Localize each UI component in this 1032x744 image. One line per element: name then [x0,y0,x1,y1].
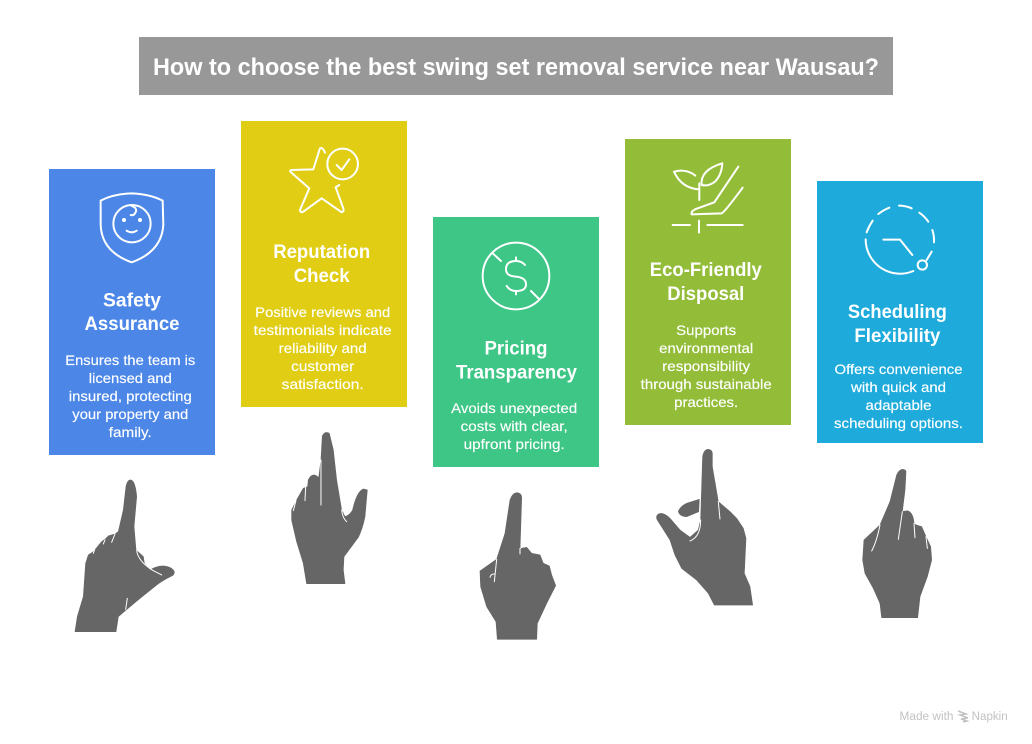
text: safety description: licensed and [89,370,172,386]
hand pointing at safety panel [75,480,174,632]
text: scheduling description [834,361,963,431]
text: eco-friendly description: through sustainable [641,376,772,392]
panel: scheduling flexibility [817,181,983,443]
hand pointing at pricing panel [480,493,556,639]
heading: eco-friendly disposal: Disposal [667,284,744,305]
text: reputation description: Positive reviews and [255,304,390,320]
title: How to choose the best swing set removal service near Wausau? [153,54,879,81]
text: eco-friendly description: Supports [676,322,736,338]
text: scheduling description: scheduling options. [834,415,963,431]
text: reputation description: testimonials indicate [254,322,392,338]
panel: reputation check [241,121,407,407]
icon: shield with baby face [101,193,163,262]
hand pointing at eco-friendly panel [657,449,753,605]
panel: eco-friendly disposal [625,139,791,425]
text: eco-friendly description: responsibility [662,358,750,374]
heading: reputation check: Reputation [273,242,370,263]
heading: pricing transparency: Transparency [456,362,577,383]
hand pointing at reputation panel [292,432,367,584]
heading: scheduling flexibility: Flexibility [854,326,941,347]
icon: dollar in a circle [483,243,549,309]
footer: made with napkin: Made with [900,711,954,723]
icon: plant in a hand [673,163,743,233]
text: scheduling description: adaptable [866,397,932,413]
text: pricing description: Avoids unexpected [451,400,577,416]
text: eco-friendly description [641,322,772,410]
text: scheduling description: with quick and [850,379,946,395]
heading: scheduling flexibility [848,302,947,347]
heading: eco-friendly disposal: Eco-Friendly [650,260,762,281]
icon: star with check badge [290,148,358,212]
text: pricing description: costs with clear, [461,418,568,434]
heading: reputation check [273,242,370,287]
text: safety description: Ensures the team is [65,352,195,368]
panel: pricing transparency [433,217,599,467]
footer: made with napkin: Napkin [972,711,1008,723]
hand pointing at scheduling panel [863,469,932,618]
text: reputation description: satisfaction. [282,376,364,392]
title [139,37,893,95]
text: safety description: insured, protecting [69,388,192,404]
heading: safety assurance [84,290,180,335]
heading: reputation check: Check [294,266,350,287]
text: safety description: your property and [72,406,188,422]
text: reputation description: customer [291,358,355,374]
text: eco-friendly description: practices. [674,394,738,410]
icon: dashed clock [866,206,934,274]
heading: pricing transparency [456,338,577,383]
text: reputation description: reliability and [279,340,367,356]
text: scheduling description: Offers convenience [834,361,963,377]
heading: pricing transparency: Pricing [484,338,548,360]
panel: safety assurance [49,169,215,455]
text: safety description [65,352,195,440]
heading: safety assurance: Safety [103,290,161,312]
text: reputation description [254,304,392,392]
heading: scheduling flexibility: Scheduling [848,302,947,323]
text: safety description: family. [109,424,152,440]
heading: safety assurance: Assurance [84,314,180,335]
heading: eco-friendly disposal [650,260,762,305]
icon: napkin logo [958,711,968,722]
text: pricing description [451,400,577,452]
footer: made with napkin [900,711,1008,723]
text: pricing description: upfront pricing. [464,436,565,452]
text: eco-friendly description: environmental [659,340,753,356]
